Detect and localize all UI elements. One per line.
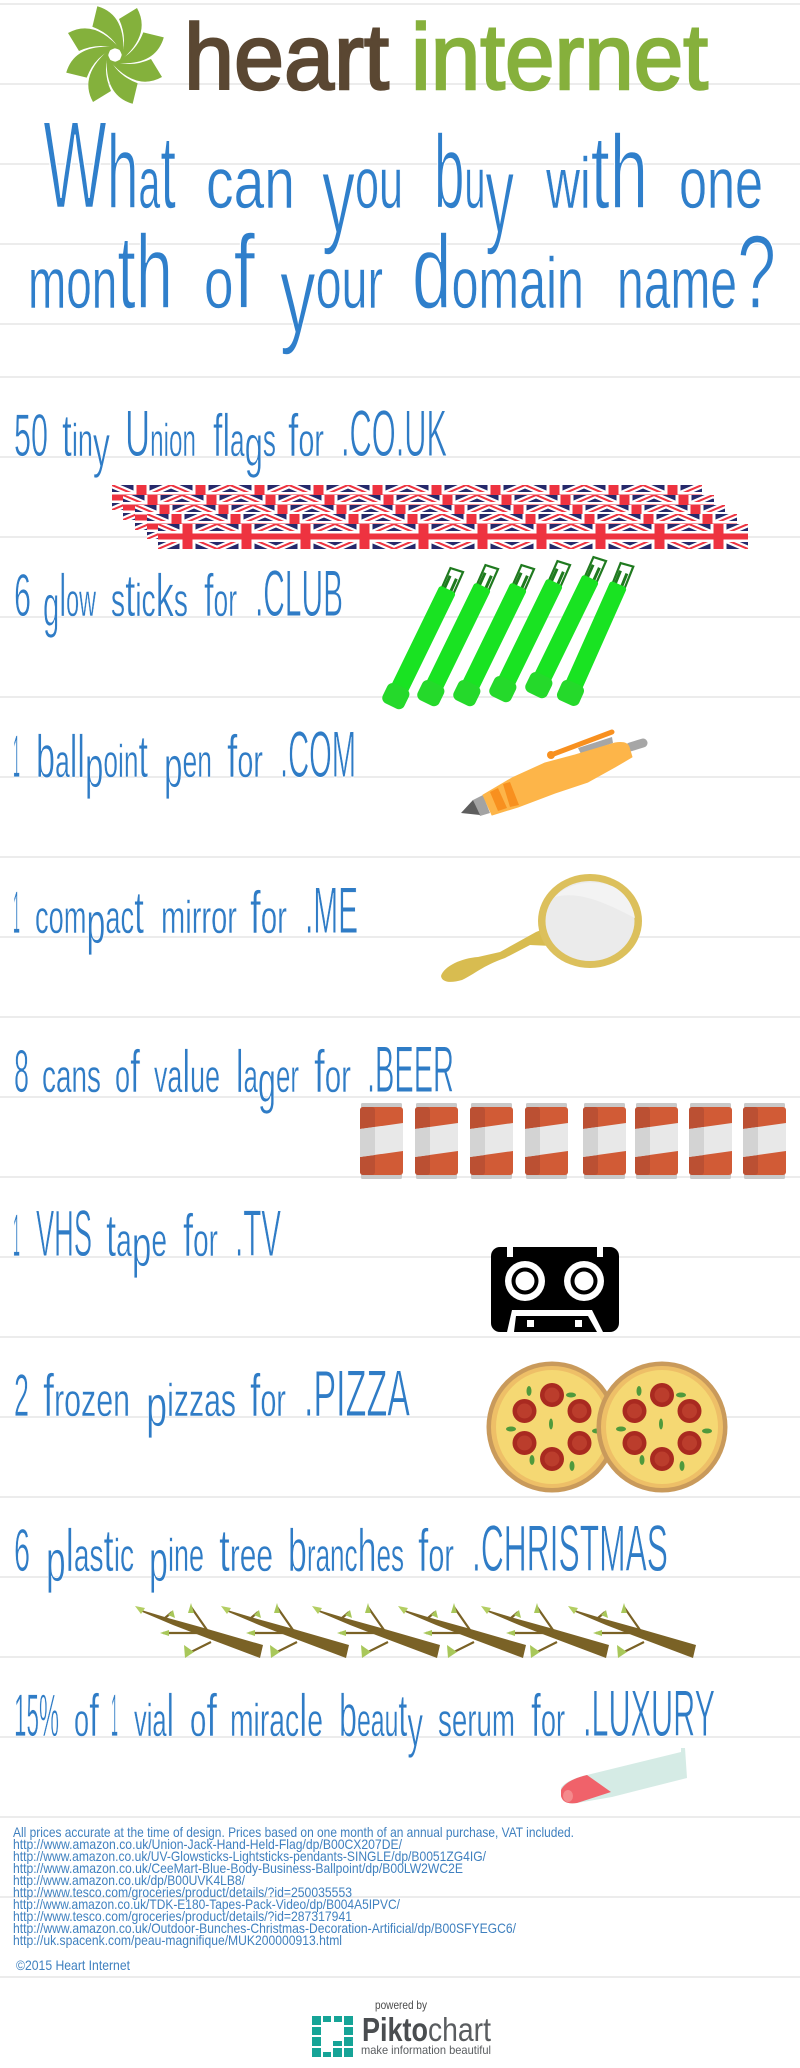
heading: 1 VHS tape for .TV: p <box>132 1214 151 1279</box>
heading: 6 plastic pine tree branches for .CHRISTMAS: branches <box>288 1517 404 1584</box>
heading: 15% of 1 vial of miracle beauty serum for .LUXURY: 15% <box>14 1682 59 1749</box>
icon: 8 beer cans <box>360 1103 786 1179</box>
heading: 1 VHS tape for .TV: e <box>151 1214 167 1266</box>
heading: 2 frozen pizzas for .PIZZA: p <box>146 1374 167 1439</box>
heading: 50 tiny Union flags for .CO.UK: tin <box>62 402 108 469</box>
heading: 1 ballpoint pen for .COM: p <box>164 735 183 800</box>
heading: 8 cans of value lager for .BEER: la <box>236 1038 269 1105</box>
heading: 6 glow sticks for .CLUB: ow <box>66 574 125 626</box>
title: y <box>322 133 355 256</box>
heading: 15% of 1 vial of miracle beauty serum for .LUXURY: for <box>531 1682 565 1749</box>
title: can <box>206 144 295 224</box>
text: .CLUB <box>255 556 343 630</box>
text: .TV <box>235 1196 281 1270</box>
heading: 15% of 1 vial of miracle beauty serum for .LUXURY: beaut <box>339 1682 434 1749</box>
source links: http://www.tesco.com/groceries/product/details/?id=250035553 <box>13 1884 352 1900</box>
heading: 8 cans of value lager for .BEER: of <box>115 1038 140 1105</box>
heading: 15% of 1 vial of miracle beauty serum for .LUXURY: of <box>190 1682 217 1749</box>
source links <box>13 1836 516 1948</box>
icon: green swirl <box>63 3 167 107</box>
source links: http://www.amazon.co.uk/dp/B00UVK4LB8/ <box>13 1872 245 1888</box>
heading: 1 ballpoint pen for .COM <box>13 717 356 800</box>
text: .CO.UK <box>341 396 447 470</box>
heading: 2 frozen pizzas for .PIZZA: 2 <box>14 1362 29 1429</box>
title: ou <box>355 144 403 224</box>
heading: 50 tiny Union flags for .CO.UK <box>14 396 447 479</box>
heading: 2 frozen pizzas for .PIZZA: for <box>250 1362 286 1429</box>
heading: 50 tiny Union flags for .CO.UK: g <box>245 414 263 479</box>
wordmark: chart: chart <box>428 2011 491 2048</box>
heading: 6 plastic pine tree branches for .CHRISTMAS: astic <box>74 1517 147 1584</box>
heading: 2 frozen pizzas for .PIZZA: frozen <box>43 1362 130 1429</box>
source links: http://www.amazon.co.uk/UV-Glowsticks-Lightsticks-pendants-SINGLE/dp/B0051ZG4IG/ <box>13 1848 486 1864</box>
icon: VHS tape <box>491 1247 619 1332</box>
wordmark: Pikto: Pikto <box>362 2011 428 2048</box>
title: of <box>204 214 256 331</box>
tagline: make information beautiful <box>361 2043 491 2057</box>
heading: 8 cans of value lager for .BEER: g <box>258 1050 276 1115</box>
icon: Piktochart mark <box>312 2016 353 2057</box>
heading: 8 cans of value lager for .BEER: for <box>314 1038 351 1105</box>
caption: powered by: powered by <box>375 1998 427 2012</box>
text: .BEER <box>367 1032 454 1106</box>
heading: 8 cans of value lager for .BEER <box>14 1032 454 1115</box>
heading: 15% of 1 vial of miracle beauty serum for .LUXURY: y <box>407 1694 423 1759</box>
heading: 1 VHS tape for .TV: VHS <box>36 1196 92 1270</box>
title: y <box>280 233 316 356</box>
title: one <box>679 144 763 224</box>
heading: 50 tiny Union flags for .CO.UK: 50 <box>14 402 48 469</box>
title: with <box>545 114 648 231</box>
heading: 1 ballpoint pen for .COM: ball <box>36 723 96 790</box>
heading: 50 tiny Union flags for .CO.UK: for <box>288 402 324 469</box>
heading: 8 cans of value lager for .BEER: er <box>276 1050 299 1102</box>
source links: http://www.amazon.co.uk/Outdoor-Bunches-Christmas-Decoration-Artificial/dp/B00SFYEGC6/ <box>13 1920 516 1936</box>
wordmark: internet: internet <box>411 5 708 109</box>
heading: 1 VHS tape for .TV: 1 <box>13 1202 20 1269</box>
heading: 50 tiny Union flags for .CO.UK: fla <box>213 402 256 469</box>
heading: 2 frozen pizzas for .PIZZA: izzas <box>167 1374 236 1426</box>
heading: 6 plastic pine tree branches for .CHRISTMAS: p <box>46 1529 66 1594</box>
logo: Heart Internet <box>63 3 708 109</box>
title: domain <box>412 214 584 331</box>
icon: 6 pine tree branches <box>135 1603 696 1658</box>
heading: 6 glow sticks for .CLUB: for <box>204 562 237 629</box>
heading: 15% of 1 vial of miracle beauty serum for .LUXURY <box>14 1676 715 1759</box>
title: y <box>485 133 514 256</box>
source links: http://www.amazon.co.uk/Union-Jack-Hand-Held-Flag/dp/B00CX207DE/ <box>13 1836 402 1852</box>
heading: 8 cans of value lager for .BEER: 8 <box>14 1038 29 1105</box>
heading: 1 compact mirror for .ME: t <box>134 879 144 946</box>
heading: 15% of 1 vial of miracle beauty serum for .LUXURY: miracle <box>230 1682 323 1749</box>
title: What <box>43 96 176 235</box>
heading: 1 ballpoint pen for .COM: p <box>85 735 103 800</box>
title: our <box>316 244 383 324</box>
title: bu <box>434 114 504 231</box>
heading: 1 compact mirror for .ME: ac <box>105 891 134 943</box>
heading: 1 compact mirror for .ME: 1 <box>13 879 20 946</box>
copyright: ©2015 Heart Internet <box>16 1957 130 1973</box>
title: name? <box>617 214 776 331</box>
note: pricing disclaimer: All prices accurate at the time of design. Prices based on one month of an annual purchase, VAT included. <box>13 1824 574 1840</box>
heading: 6 glow sticks for .CLUB <box>14 556 343 639</box>
heading: 1 compact mirror for .ME: for <box>250 879 287 946</box>
heading: 6 plastic pine tree branches for .CHRISTMAS: tree <box>219 1517 273 1584</box>
heading: 1 compact mirror for .ME: mirror <box>161 891 237 943</box>
heading: 2 frozen pizzas for .PIZZA <box>14 1356 410 1439</box>
heading: 6 plastic pine tree branches for .CHRISTMAS <box>14 1511 668 1594</box>
heading: 6 plastic pine tree branches for .CHRISTMAS: for <box>418 1517 454 1584</box>
heading: 15% of 1 vial of miracle beauty serum for .LUXURY: 1 <box>111 1682 118 1749</box>
heading: 50 tiny Union flags for .CO.UK: y <box>93 414 110 479</box>
heading: 1 compact mirror for .ME: p <box>86 891 105 956</box>
icon: ballpoint pen <box>461 732 643 816</box>
icon: beauty serum vial <box>561 1748 687 1803</box>
text: .ME <box>305 873 358 947</box>
icon: compact mirror <box>441 874 642 982</box>
heading: 15% of 1 vial of miracle beauty serum for .LUXURY: of <box>74 1682 99 1749</box>
heading: 6 glow sticks for .CLUB: sticks <box>111 562 188 629</box>
heading: 6 plastic pine tree branches for .CHRISTMAS: l <box>66 1517 74 1584</box>
title: month <box>28 214 173 331</box>
heading: 1 ballpoint pen for .COM: 1 <box>13 723 20 790</box>
heading: 8 cans of value lager for .BEER: value <box>154 1038 220 1105</box>
heading: 1 VHS tape for .TV <box>13 1196 281 1279</box>
powered by Piktochart <box>312 1998 491 2057</box>
heading: 8 cans of value lager for .BEER: cans <box>42 1050 101 1102</box>
heading: 6 glow sticks for .CLUB: l <box>59 562 66 629</box>
heading: 1 VHS tape for .TV: ta <box>106 1202 142 1269</box>
heading: 1 VHS tape for .TV: for <box>183 1202 218 1269</box>
heading: 15% of 1 vial of miracle beauty serum for .LUXURY: serum <box>438 1694 515 1746</box>
wordmark: heart: heart <box>184 5 389 109</box>
footer: sources <box>13 1824 574 1973</box>
text: .COM <box>280 717 356 791</box>
source links: http://www.amazon.co.uk/CeeMart-Blue-Body-Business-Ballpoint/dp/B00LW2WC2E <box>13 1860 463 1876</box>
heading: 6 plastic pine tree branches for .CHRISTMAS: p <box>149 1529 168 1594</box>
heading: 6 glow sticks for .CLUB: 6 <box>14 562 31 629</box>
heading: 1 ballpoint pen for .COM: en <box>183 735 212 787</box>
icon: 2 frozen pizzas <box>486 1362 728 1492</box>
heading: 50 tiny Union flags for .CO.UK: Union <box>125 396 196 470</box>
heading: 1 compact mirror for .ME: com <box>35 891 122 943</box>
heading: 6 plastic pine tree branches for .CHRISTMAS: ine <box>168 1529 204 1581</box>
heading: 1 compact mirror for .ME <box>13 873 358 956</box>
source links: http://uk.spacenk.com/peau-magnifique/MUK200000913.html <box>13 1932 342 1948</box>
icon: 50 union flags <box>112 485 748 549</box>
heading: 6 plastic pine tree branches for .CHRISTMAS: 6 <box>14 1517 30 1584</box>
source links: http://www.amazon.co.uk/TDK-E180-Tapes-Pack-Video/dp/B004A5IPVC/ <box>13 1896 400 1912</box>
heading: 1 ballpoint pen for .COM: t <box>138 723 148 790</box>
heading: 2 frozen pizzas for .PIZZA: .PIZZA <box>304 1356 410 1430</box>
heading: 6 glow sticks for .CLUB: g <box>43 574 59 639</box>
heading: 15% of 1 vial of miracle beauty serum for .LUXURY: vial <box>134 1682 174 1749</box>
heading: 50 tiny Union flags for .CO.UK: s <box>263 414 276 466</box>
source links: http://www.tesco.com/groceries/product/details/?id=287317941 <box>13 1908 352 1924</box>
heading: 1 ballpoint pen for .COM: for <box>227 723 263 790</box>
heading: 1 ballpoint pen for .COM: oin <box>103 735 138 787</box>
icon: 6 glow sticks <box>380 553 639 711</box>
title <box>28 96 776 356</box>
